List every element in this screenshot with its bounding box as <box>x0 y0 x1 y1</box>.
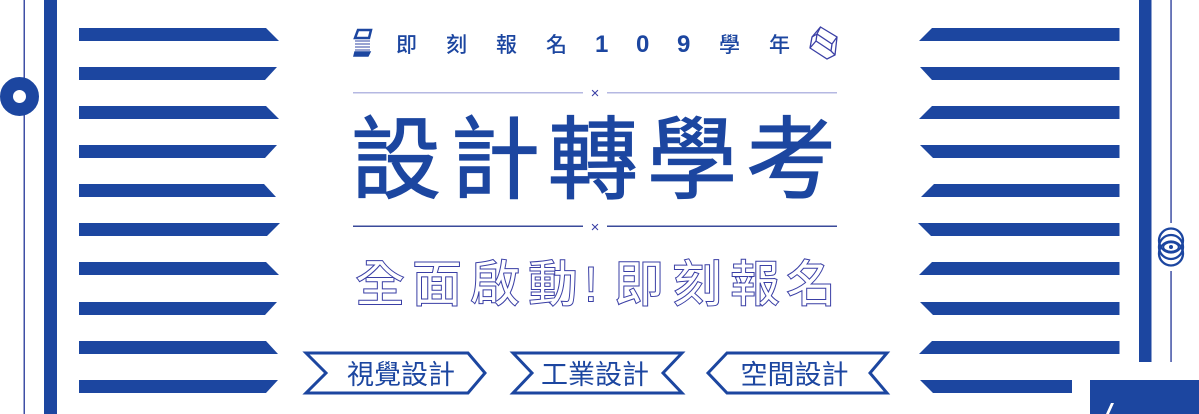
right frame with eye icon <box>1139 0 1183 362</box>
left striped bars <box>79 28 280 393</box>
right striped bars <box>918 28 1120 393</box>
divider: upper rule: × <box>591 85 599 102</box>
heading: year digits: 109 <box>595 31 690 58</box>
tag: visual design: 視覺設計 <box>347 360 455 390</box>
tag: visual design <box>306 353 485 393</box>
corner blue block <box>1090 380 1199 414</box>
heading: enrol now academic year 109: 即刻報名 <box>396 34 567 57</box>
title: 設計轉學考 <box>351 111 836 211</box>
tag: spatial design: 空間設計 <box>740 360 848 390</box>
divider: lower rule: × <box>591 219 599 236</box>
icon: wireframe cube <box>810 27 837 59</box>
icon: stack of sheets <box>354 30 371 56</box>
tag: spatial design <box>708 353 887 393</box>
heading: academic year label: 學年 <box>719 34 790 57</box>
tag: industrial design <box>513 353 682 393</box>
subtitle: outlined text: 全面啟動!即刻報名 <box>355 256 836 312</box>
tag: industrial design: 工業設計 <box>541 360 649 390</box>
left frame with ring <box>6 0 57 414</box>
